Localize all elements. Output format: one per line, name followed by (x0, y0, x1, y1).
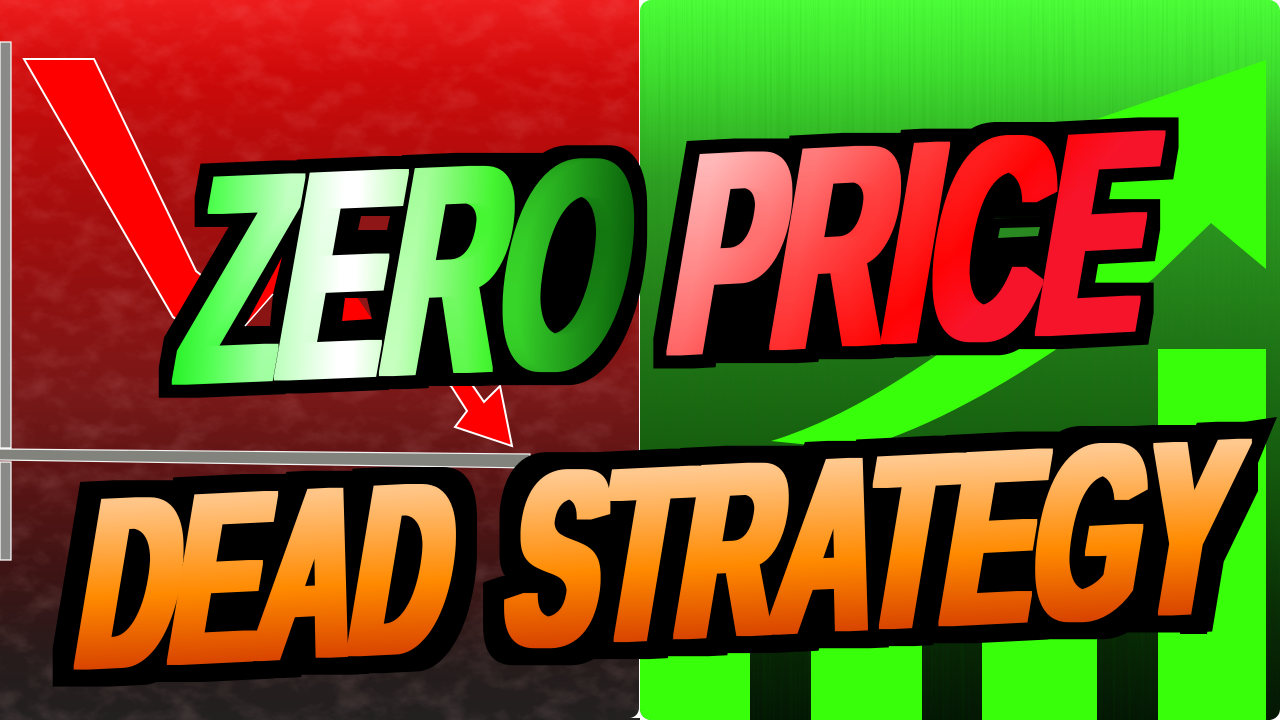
outline corner behind Y (1180, 417, 1277, 634)
word: ZERO: ZERO (163, 98, 659, 447)
panel: red falling chart (0, 0, 640, 720)
word: DEAD: DEAD (63, 432, 474, 720)
falling red arrow (24, 59, 512, 446)
rising green arrow (771, 60, 1266, 450)
windows through ZERO letters (245, 216, 390, 326)
aperture of letter C (980, 217, 1042, 260)
title: ZERO (163, 98, 659, 447)
title: DEAD STRATEGY (63, 387, 1277, 720)
bar chart columns (640, 349, 1266, 720)
panel: green rising chart (640, 0, 1280, 720)
title: PRICE (653, 70, 1178, 415)
green panel background (640, 0, 1280, 720)
vertical axis (0, 42, 11, 560)
red panel background (0, 0, 640, 720)
horizontal axis (0, 449, 530, 468)
